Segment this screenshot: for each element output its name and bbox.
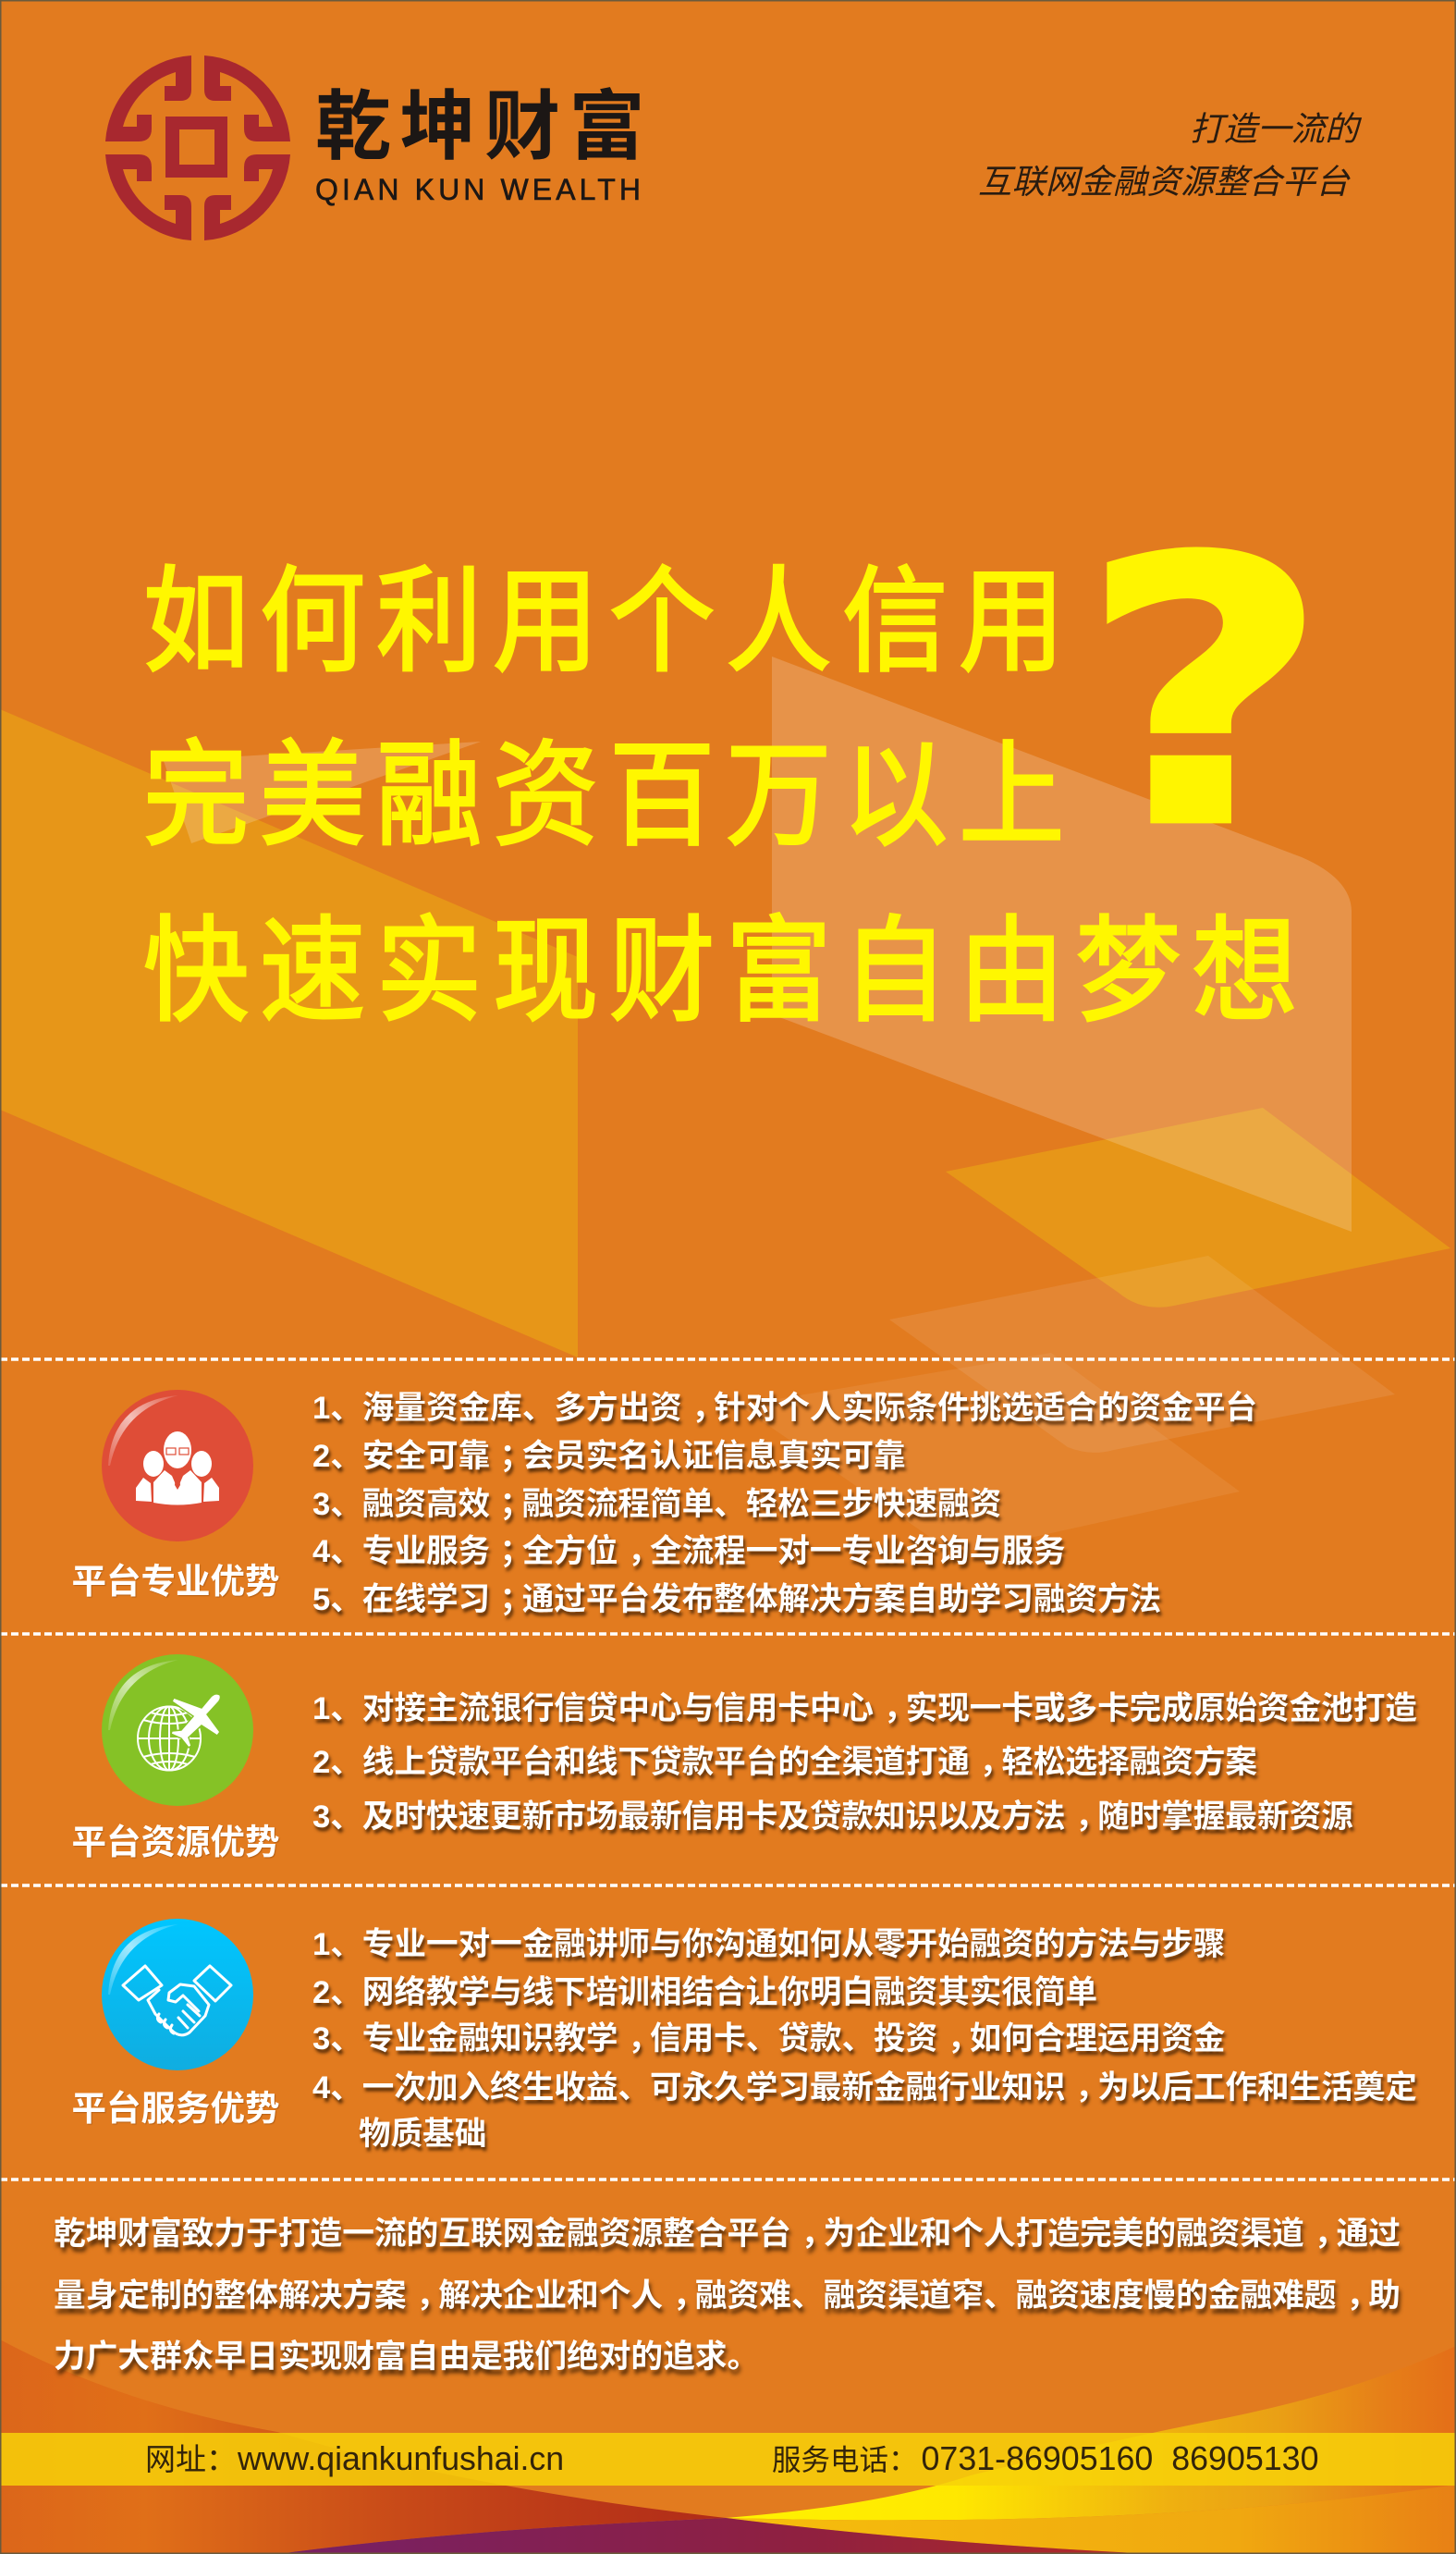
list — [312, 1690, 1420, 1836]
list: 2、安全可靠 ；会员实名认证信息真实可靠 — [312, 1439, 906, 1474]
paragraph: company statement: 量身定制的整体解决方案 ，解决企业和个人 ，融资难、融资渠道窄、融资速度慢的金融难题 ，助 — [54, 2278, 1401, 2314]
list: 2、线上贷款平台和线下贷款平台的全渠道打通 ，轻松选择融资方案 — [312, 1745, 1257, 1780]
panel: platform expertise — [72, 1390, 1259, 1621]
paragraph: company statement — [54, 2216, 1403, 2378]
icon: globe and plane — [102, 1654, 253, 1806]
list — [312, 1927, 1420, 2153]
list: 物质基础 — [359, 2117, 486, 2152]
slogan — [978, 110, 1363, 201]
title: 完美融资百万以上 — [143, 732, 1075, 860]
list: 3、专业金融知识教学 ，信用卡、贷款、投资 ，如何合理运用资金 — [312, 2021, 1225, 2057]
footer contact bar — [145, 2440, 1318, 2477]
list: 1、海量资金库、多方出资 ，针对个人实际条件挑选适合的资金平台 — [312, 1391, 1257, 1426]
label: 平台资源优势 — [72, 1823, 279, 1861]
list — [312, 1391, 1259, 1621]
title — [143, 559, 1308, 1036]
icon: people — [102, 1390, 253, 1541]
list: 2、网络教学与线下培训相结合让你明白融资其实很简单 — [312, 1975, 1097, 2010]
title: 如何利用个人信用 — [143, 559, 1075, 686]
icon: logo coin emblem — [105, 55, 290, 240]
list: 5、在线学习 ；通过平台发布整体解决方案自助学习融资方法 — [312, 1582, 1161, 1617]
paragraph: company statement: 力广大群众早日实现财富自由是我们绝对的追求。 — [54, 2339, 759, 2375]
phone: 服务电话：0731-86905160 86905130 — [772, 2440, 1318, 2477]
list: 4、一次加入终生收益、可永久学习最新金融行业知识 ，为以后工作和生活奠定 — [312, 2070, 1417, 2106]
question mark: ? — [1080, 481, 1329, 908]
logo english name: QIAN KUN WEALTH — [315, 173, 644, 206]
label: 平台服务优势 — [72, 2089, 279, 2128]
list: 1、对接主流银行信贷中心与信用卡中心 ，实现一卡或多卡完成原始资金池打造 — [312, 1691, 1417, 1726]
title: 快速实现财富自由梦想 — [143, 908, 1308, 1036]
panel: platform services — [72, 1919, 1420, 2153]
website: 网址：www.qiankunfushai.cn — [145, 2440, 564, 2477]
slogan: 打造一流的 — [1190, 110, 1359, 148]
list: 3、及时快速更新市场最新信用卡及贷款知识以及方法 ，随时掌握最新资源 — [312, 1799, 1353, 1835]
slogan: 互联网金融资源整合平台 — [978, 163, 1350, 201]
list: 4、专业服务 ；全方位 ，全流程一对一专业咨询与服务 — [312, 1534, 1066, 1569]
list: 1、专业一对一金融讲师与你沟通如何从零开始融资的方法与步骤 — [312, 1927, 1225, 1962]
logo name: 乾坤财富 — [315, 85, 654, 169]
list: 3、融资高效 ；融资流程简单、轻松三步快速融资 — [312, 1487, 1001, 1522]
icon: handshake — [102, 1919, 253, 2070]
paragraph: company statement: 乾坤财富致力于打造一流的互联网金融资源整合平台 ，为企业和个人打造完美的融资渠道 ，通过 — [54, 2216, 1401, 2252]
logo — [105, 55, 654, 240]
panel: platform resources — [72, 1654, 1420, 1861]
label: 平台专业优势 — [72, 1562, 279, 1601]
